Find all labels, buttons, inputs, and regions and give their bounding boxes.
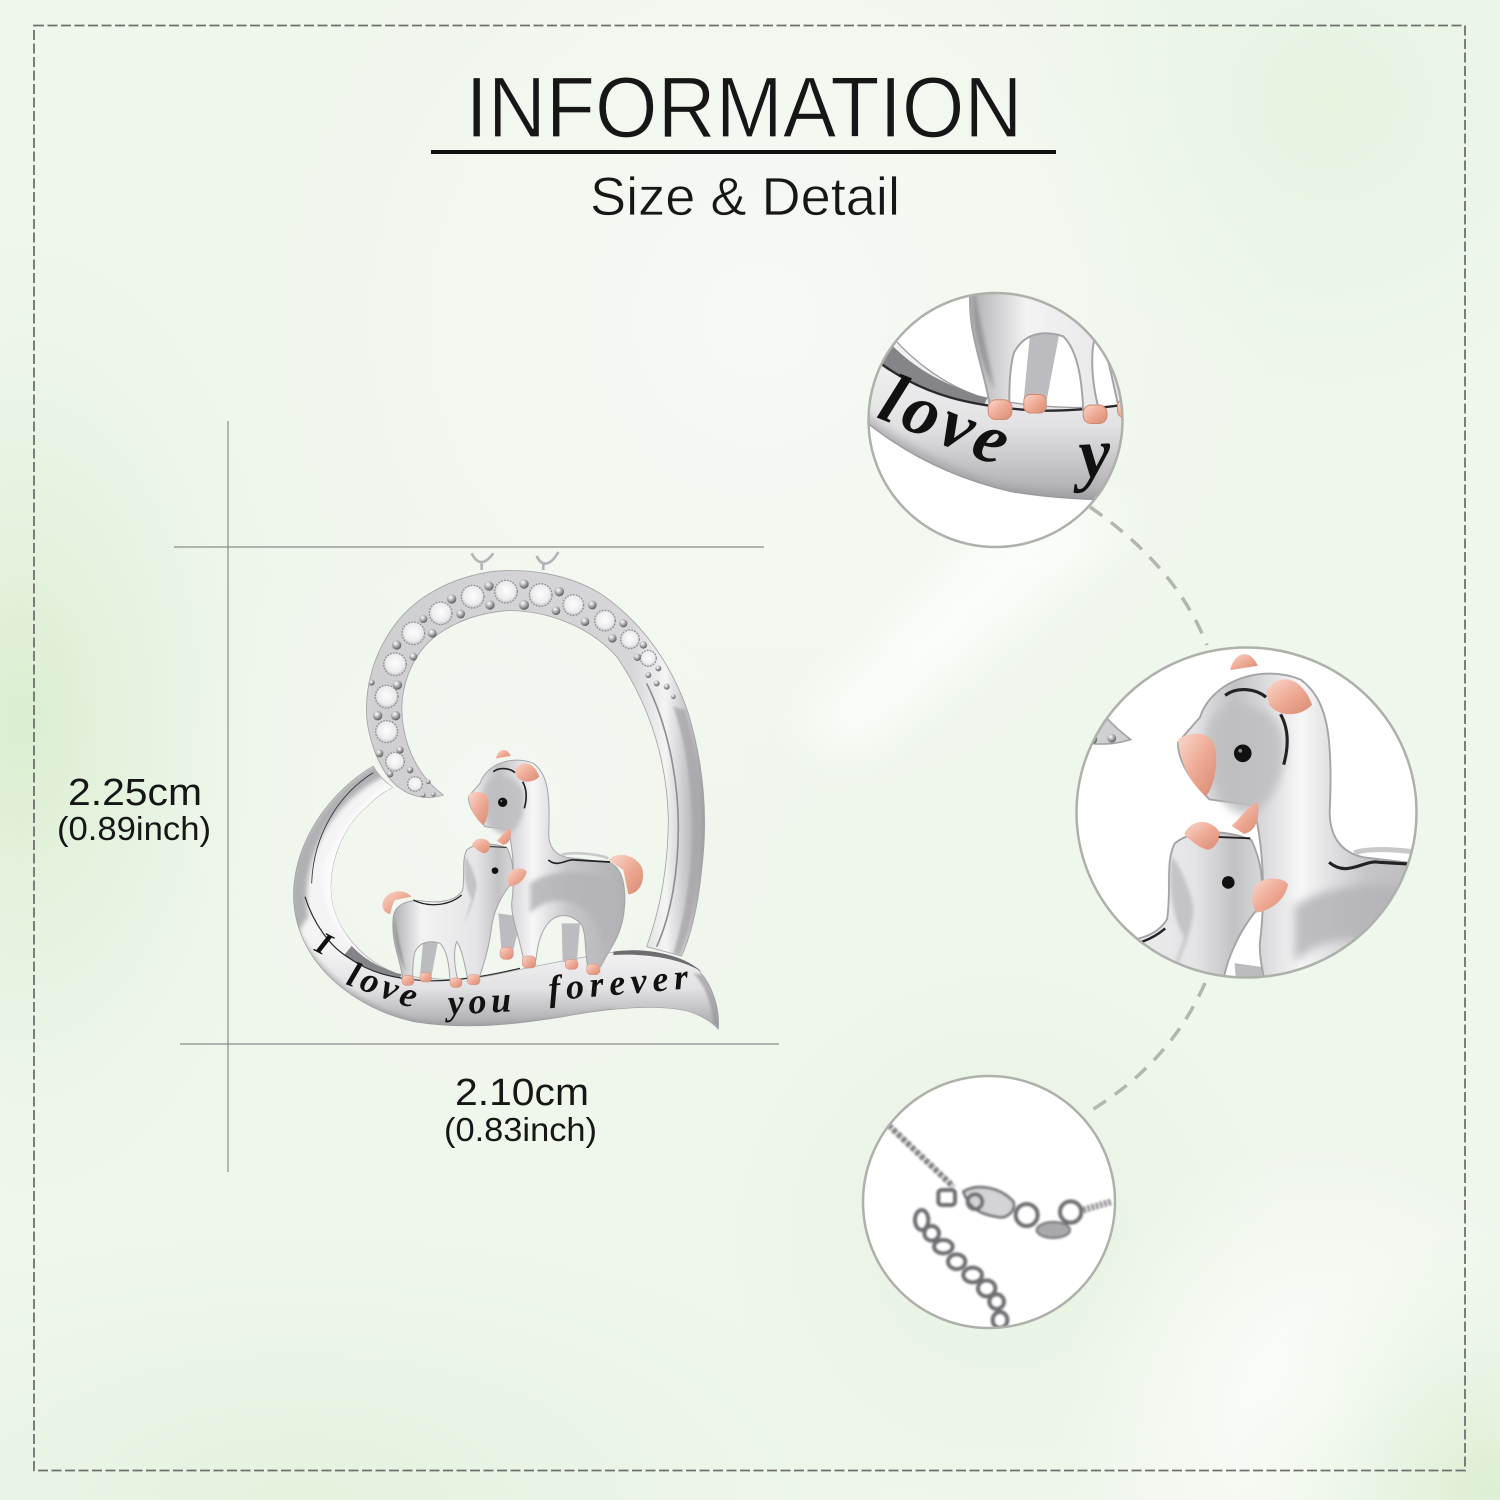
height label	[57, 772, 211, 847]
subtitle: Size & Detail	[590, 167, 900, 227]
dimension lines	[174, 421, 779, 1172]
engraving: I love you forever: I	[309, 924, 339, 963]
height label: 2.25cm	[68, 772, 202, 814]
engraving: I love you forever	[309, 924, 690, 1023]
circle: engraving detail: love	[869, 359, 1021, 481]
circle: engraving detail: y	[1069, 413, 1113, 494]
dashed connector upper	[1090, 507, 1207, 645]
circle: engraving detail	[867, 292, 1124, 548]
engraving: I love you forever: love	[342, 954, 423, 1016]
title: INFORMATION	[466, 60, 1022, 156]
width label: 2.10cm	[455, 1072, 589, 1114]
width label: (0.83inch)	[444, 1111, 597, 1148]
engraving: I love you forever: you	[443, 979, 512, 1023]
height label: (0.89inch)	[57, 810, 211, 847]
width label	[444, 1072, 597, 1148]
dashed connector lower	[1092, 983, 1205, 1110]
pendant: heart with alpacas	[290, 552, 723, 1037]
circle: alpaca detail	[1075, 646, 1418, 979]
circle: chain and clasp detail	[863, 1076, 1115, 1328]
engraving: I love you forever: forever	[547, 956, 690, 1009]
